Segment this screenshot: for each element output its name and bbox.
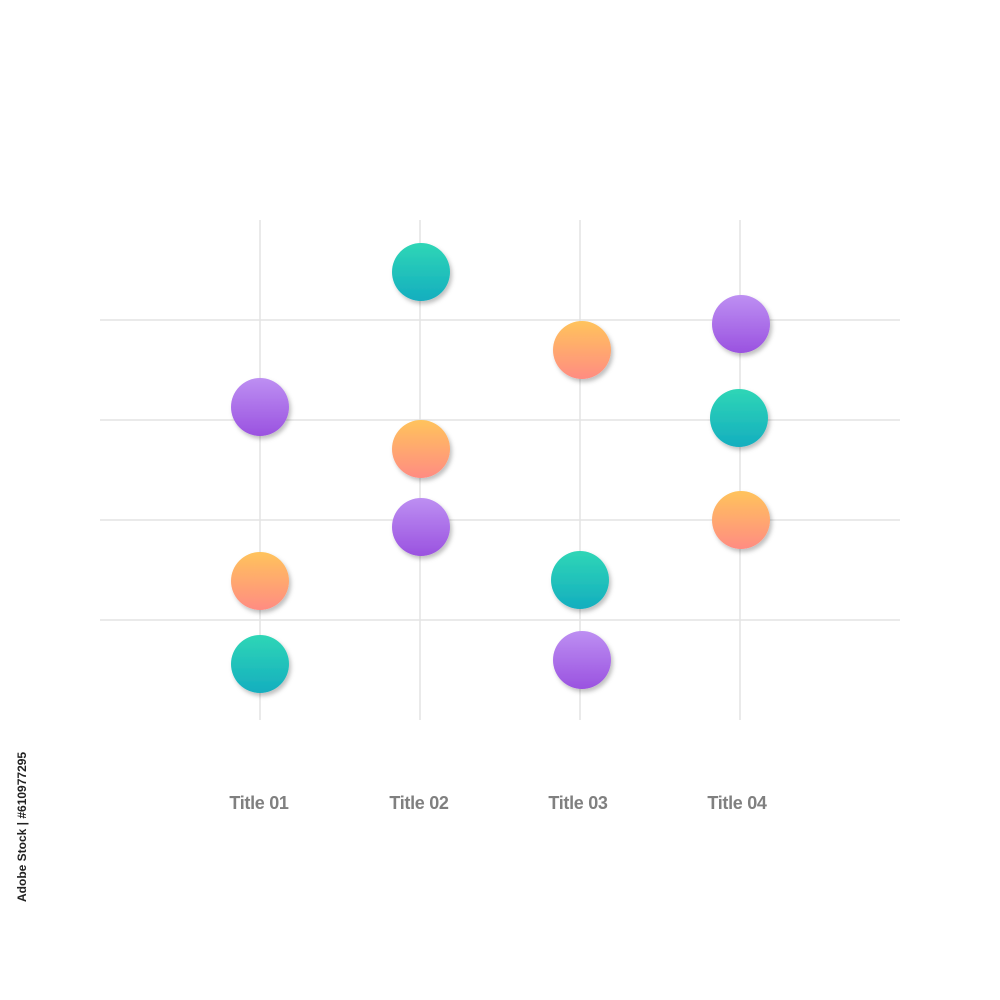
- watermark text: Adobe Stock | #610977295: [15, 752, 29, 902]
- column 3 dots: [551, 321, 611, 689]
- label: Title 02: Title 02: [389, 793, 449, 813]
- column 2 dots: [392, 243, 450, 556]
- column 1 dots: [231, 378, 289, 693]
- label: Title 04: Title 04: [707, 793, 767, 813]
- column 4 dots: [710, 295, 770, 549]
- label: Title 03: Title 03: [548, 793, 608, 813]
- label: Title 01: Title 01: [229, 793, 289, 813]
